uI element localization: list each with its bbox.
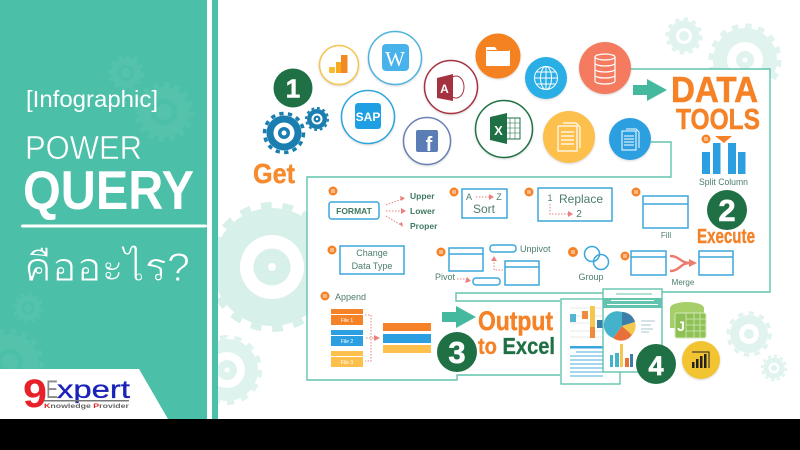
Sort tool: Z (496, 192, 502, 202)
FORMAT tool: Upper (410, 191, 435, 201)
icon: yellow documents (543, 111, 595, 163)
Merge tool (620, 251, 733, 287)
icon: Facebook: f (426, 134, 433, 156)
Replace tool: 2 (576, 209, 582, 220)
icon: SAP (342, 90, 394, 144)
Fill tool (632, 188, 688, 240)
Sort tool (450, 188, 507, 218)
step 3 badge: 3 (448, 335, 466, 370)
Sort tool: A (466, 192, 472, 202)
step 4 badge: 4 (648, 351, 664, 381)
heading: to Excel: to Excel (478, 333, 555, 359)
side strip (207, 0, 212, 419)
Fill tool: Fill (661, 231, 671, 240)
logo: 9Expert: xpert (57, 376, 130, 404)
icon: Facebook (404, 118, 450, 164)
label: Get: Get (253, 158, 295, 189)
logo: 9Expert (0, 369, 168, 419)
Replace tool: 1 (547, 193, 553, 203)
heading: TOOLS: TOOLS (676, 104, 760, 136)
title divider (21, 224, 207, 228)
heading: Output: Output (478, 306, 553, 336)
heading: QUERY: QUERY (23, 159, 194, 221)
Pivot and Unpivot tool (435, 244, 551, 285)
Group tool (568, 246, 608, 282)
Append tool: File 3 (341, 360, 353, 366)
Replace tool: Replace (559, 192, 603, 206)
icon: Wikipedia: W (385, 47, 405, 71)
logo: 9Expert: 9 (23, 372, 47, 416)
icon: Wikipedia (368, 32, 422, 84)
icon: large gear (264, 114, 304, 152)
Sort tool: Sort (473, 202, 496, 216)
heading: Thai subtitle: คืออะไร? (24, 245, 190, 290)
teal strip (212, 0, 218, 419)
heading: POWER: POWER (25, 129, 142, 166)
arrow to Output (442, 306, 476, 328)
process frame background (307, 69, 770, 380)
icon: Power Query J cube (670, 302, 706, 338)
Pivot and Unpivot tool: Unpivot (520, 244, 551, 254)
step 1 badge: 1 (286, 74, 300, 104)
Change Data Type tool: Change (356, 248, 388, 258)
Append tool: File 1 (341, 318, 353, 324)
icon: database (579, 42, 631, 94)
icon: Power BI (682, 341, 720, 379)
step 1 badge (274, 68, 312, 108)
icon: small gear (306, 108, 328, 130)
icon: Excel (476, 100, 532, 158)
Merge tool: Merge (672, 278, 695, 287)
FORMAT tool: Proper (410, 221, 438, 231)
icon: Google Analytics (320, 46, 358, 84)
FORMAT tool: Lower (410, 206, 436, 216)
step 3 badge (437, 332, 477, 372)
Append tool: Append (335, 292, 366, 302)
label: Execute: Execute (697, 226, 755, 248)
background gears (194, 19, 786, 403)
Change Data Type tool (328, 246, 404, 274)
heading: [Infographic]: [Infographic] (26, 86, 158, 112)
Pivot and Unpivot tool: Pivot (435, 272, 456, 282)
bottom black band (0, 419, 800, 450)
Replace tool (524, 188, 612, 221)
icon: Power Query J cube: J (677, 318, 685, 334)
icon: Microsoft Access: A (440, 82, 449, 96)
heading: DATA: DATA (671, 69, 758, 110)
Append tool (320, 292, 431, 367)
icon: Microsoft Access (424, 60, 478, 114)
FORMAT tool (328, 186, 438, 231)
icon: SAP: SAP (356, 110, 380, 124)
Append tool: File 2 (341, 339, 353, 345)
logo: 9Expert: E (46, 376, 58, 404)
icon: globe (525, 57, 567, 99)
step 4 badge (636, 344, 676, 384)
report page two (603, 289, 662, 372)
label: Split Column: Split Column (699, 177, 748, 187)
icon: blue documents (609, 118, 651, 160)
Change Data Type tool: Data Type (352, 261, 392, 271)
step 2 badge: 2 (718, 193, 736, 228)
process frame lines (307, 69, 770, 380)
Group tool: Group (578, 272, 604, 282)
FORMAT tool: FORMAT (336, 206, 373, 216)
icon: Excel: X (494, 123, 503, 138)
arrow to Data Tools (633, 79, 667, 101)
split column chart (702, 134, 746, 174)
report page one (561, 299, 620, 384)
icon: folder (476, 34, 520, 78)
logo: 9Expert: K nowledge Provider (44, 403, 130, 410)
left title panel (0, 0, 207, 419)
step 2 badge (707, 190, 747, 230)
